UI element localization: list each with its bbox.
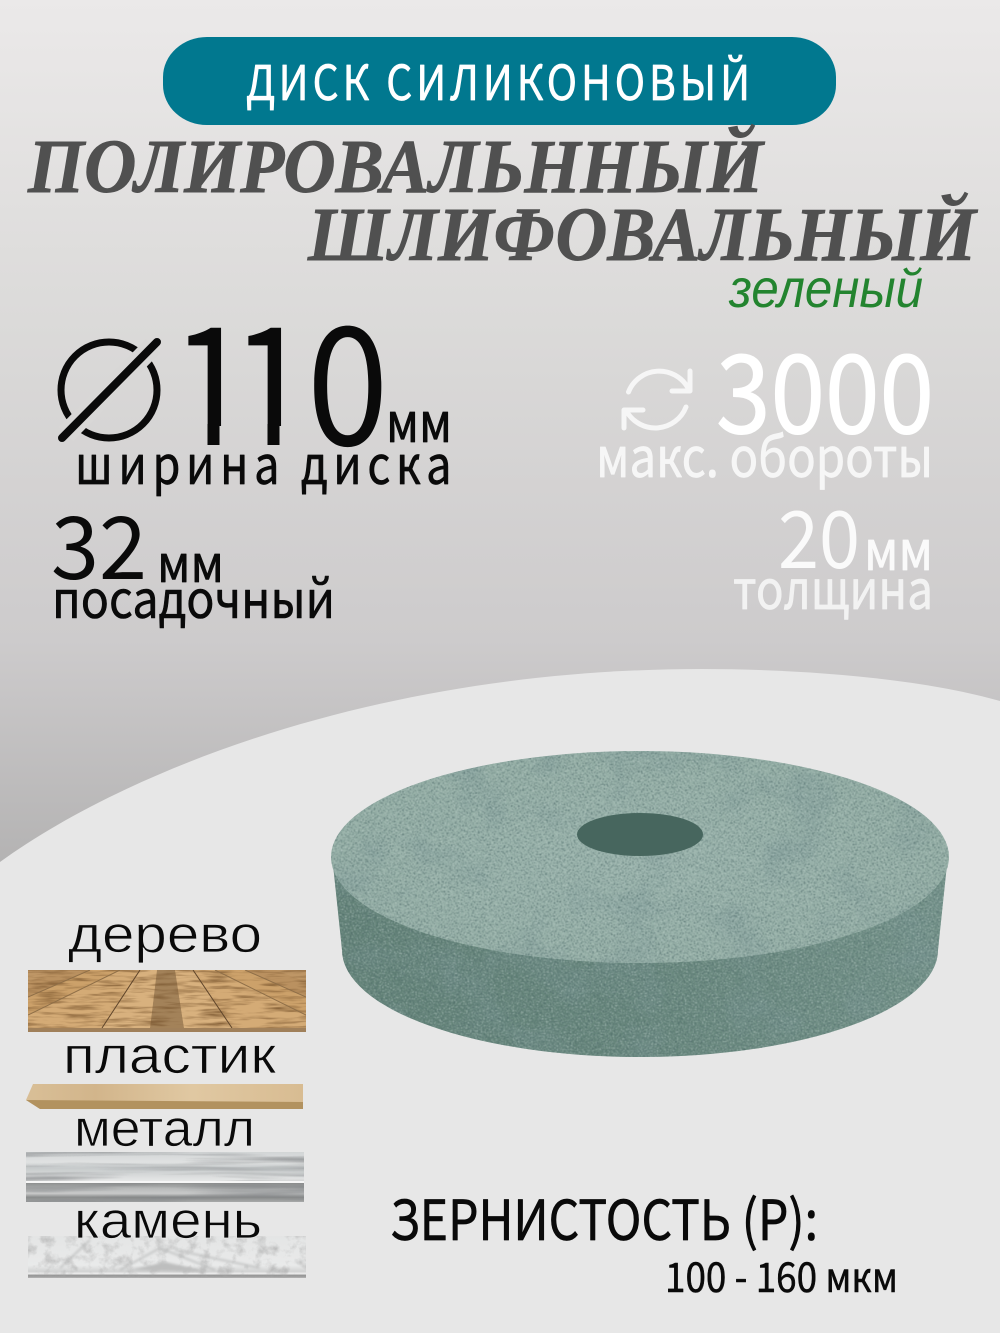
- icon: rotation arrows: [624, 371, 690, 428]
- thickness spec: [733, 476, 933, 625]
- diameter caption: ширина диска: [75, 424, 452, 500]
- rpm caption: макс. обороты: [596, 413, 933, 493]
- grit heading: ЗЕРНИСТОСТЬ (Р):: [390, 1176, 818, 1256]
- icon: diameter symbol: [61, 342, 157, 438]
- bore unit: мм: [157, 522, 224, 597]
- diameter unit: мм: [386, 378, 452, 458]
- swatch: metal: [26, 1152, 304, 1202]
- disc centre hole: [577, 813, 703, 856]
- rpm spec: [596, 308, 934, 493]
- thickness unit: мм: [864, 506, 933, 586]
- swatch: stone: [28, 1236, 306, 1278]
- title pill: [163, 37, 836, 125]
- diameter value: [188, 326, 382, 448]
- diameter spec: [58, 326, 448, 496]
- disc side: [332, 855, 948, 1057]
- rpm value: 3000: [716, 308, 934, 465]
- thickness value: 20: [778, 476, 860, 591]
- diameter value: 110: [171, 261, 389, 492]
- product photo: green disc: [331, 751, 949, 1057]
- bore value: 32: [51, 479, 147, 605]
- bore caption: посадочный: [52, 558, 335, 633]
- swatch: wood: [28, 970, 306, 1032]
- heading: grinding: ШЛИФОВАЛЬНЫЙ: [307, 192, 979, 277]
- label: stone: камень: [74, 1192, 262, 1250]
- disc top face: [331, 751, 949, 963]
- colour label: зеленый: [728, 259, 923, 319]
- grit value: 100 - 160 мкм: [665, 1244, 898, 1304]
- heading: polishing: ПОЛИРОВАЛЬННЫЙ: [27, 124, 766, 209]
- swatch: plastic: [26, 1084, 303, 1109]
- label: plastic: пластик: [63, 1027, 276, 1085]
- light curved panel: [0, 669, 1000, 1333]
- thickness caption: толщина: [733, 546, 933, 625]
- label: wood: дерево: [68, 906, 262, 964]
- bore spec: [51, 479, 335, 633]
- title pill: ДИСК СИЛИКОНОВЫЙ: [246, 44, 750, 114]
- materials list: [26, 906, 306, 1278]
- label: metal: металл: [74, 1100, 255, 1158]
